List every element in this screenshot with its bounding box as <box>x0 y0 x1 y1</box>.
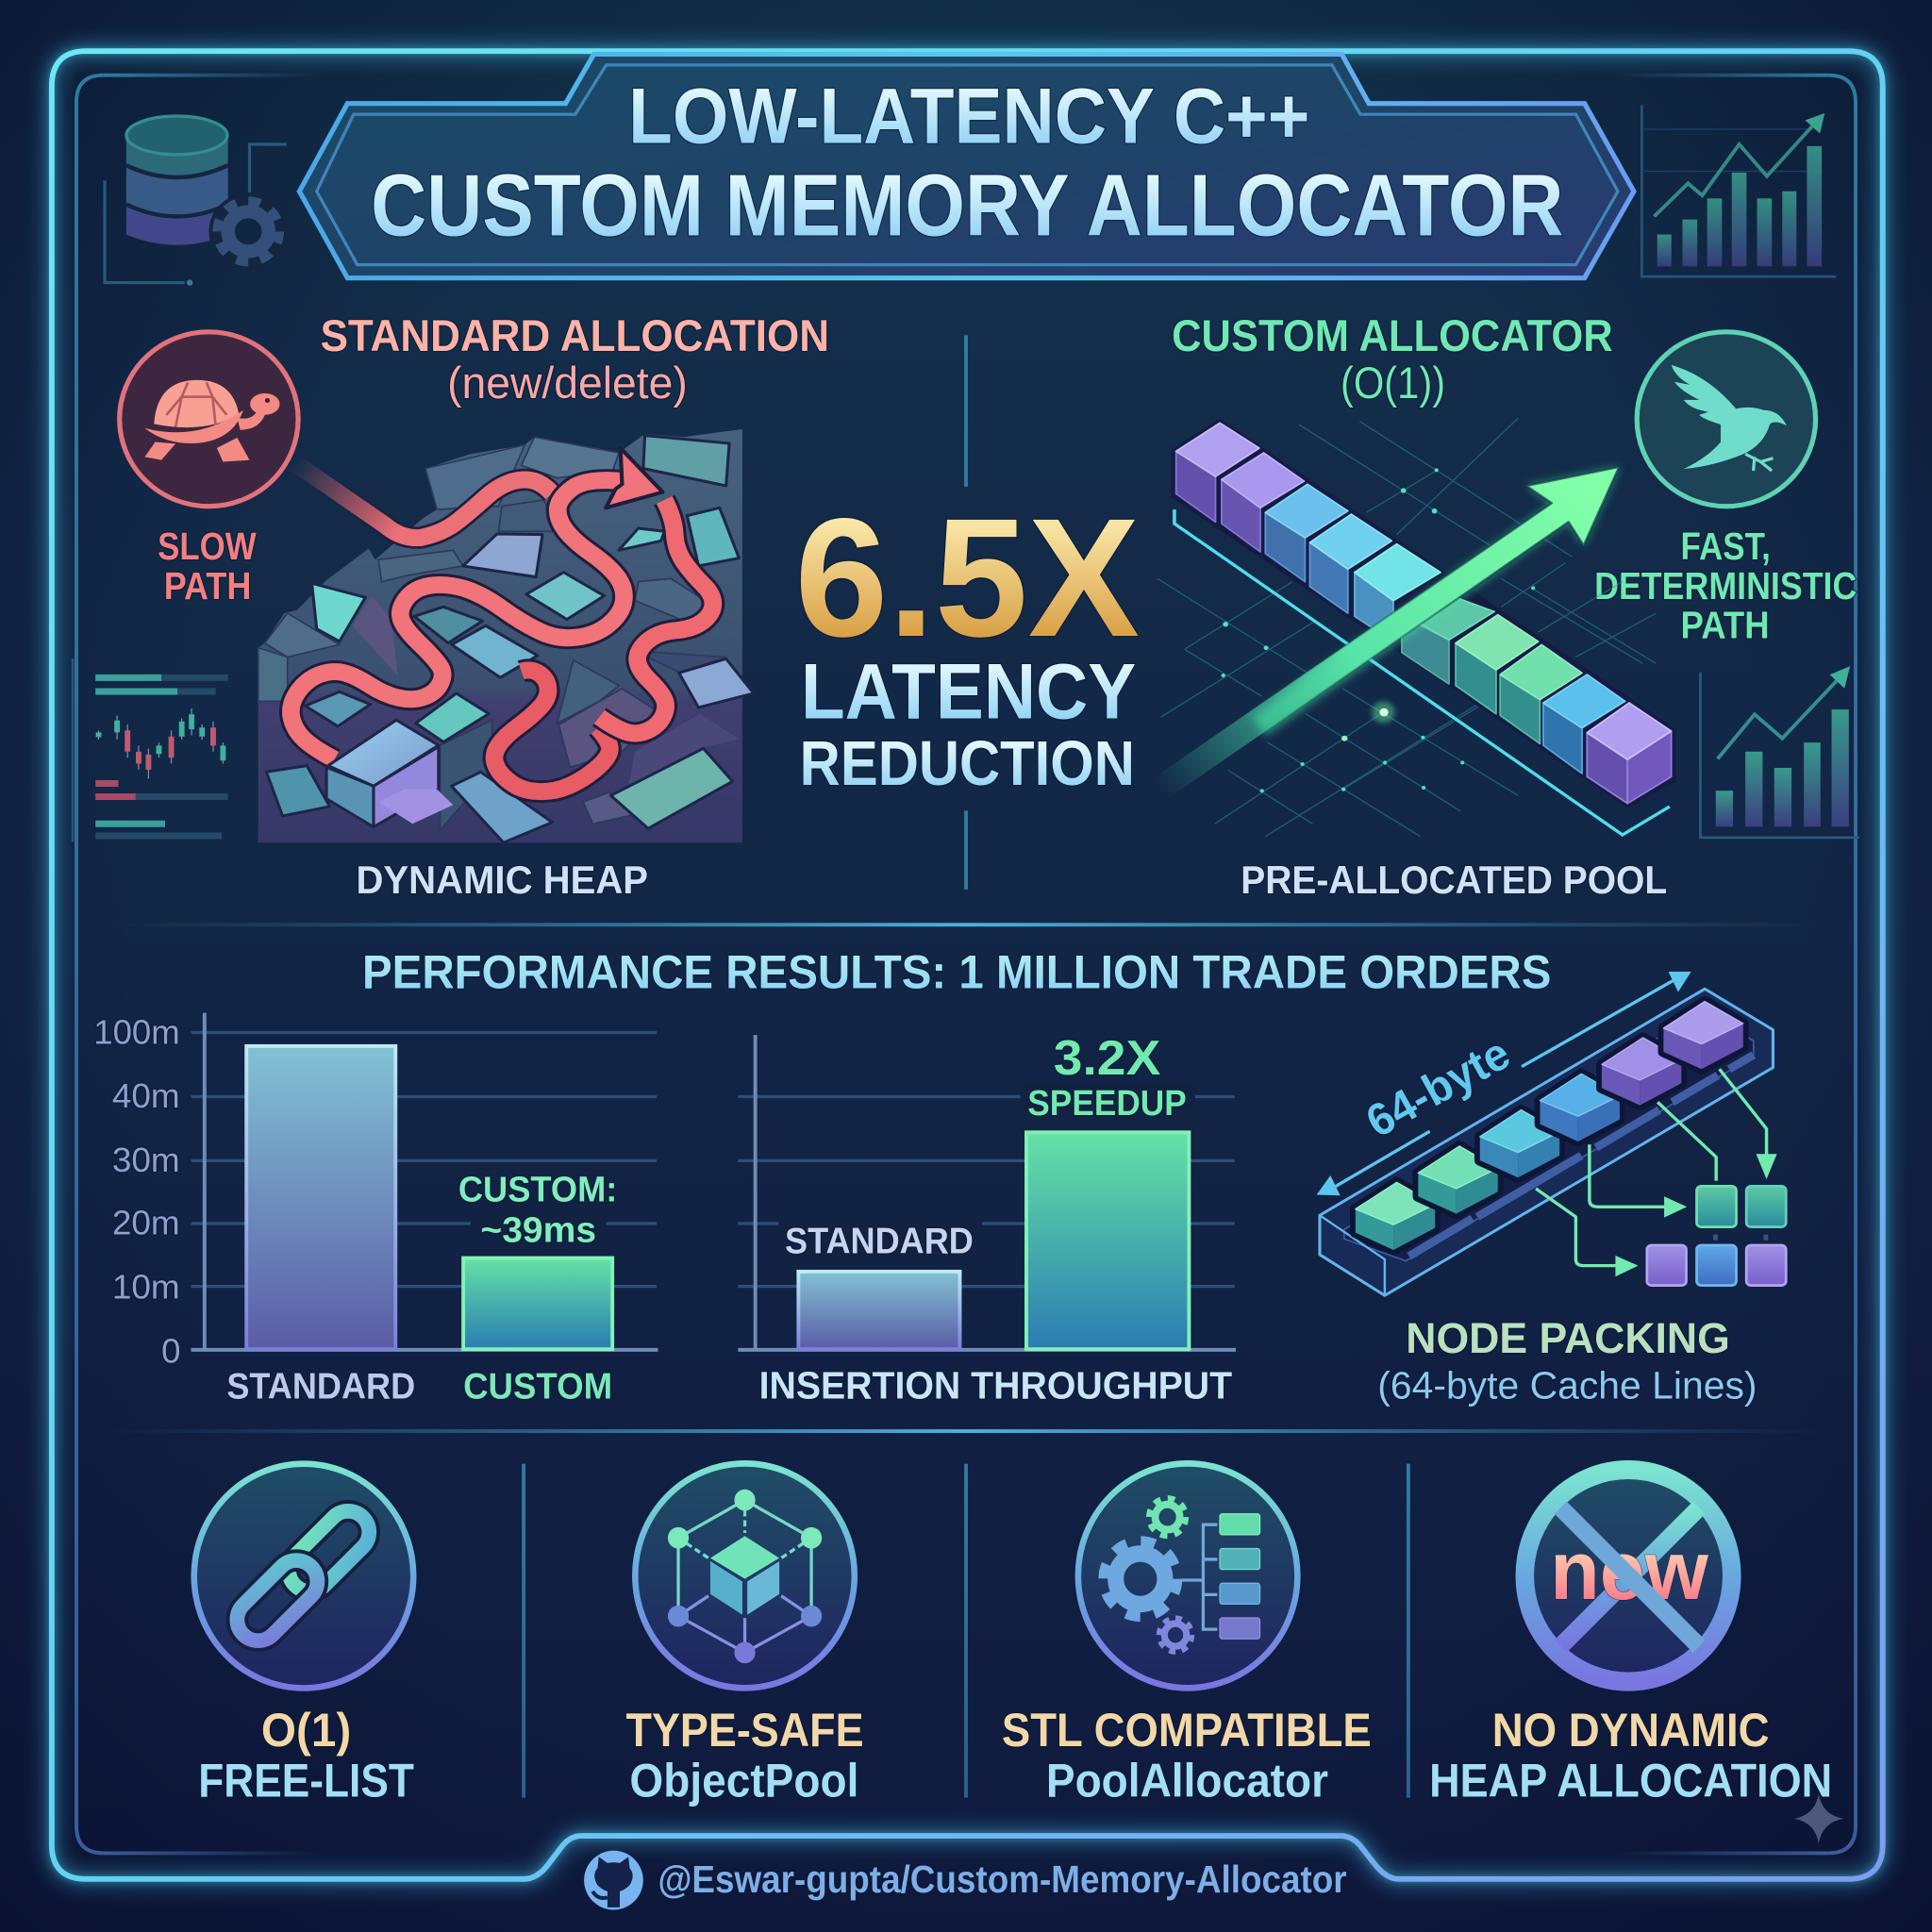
headline metric: LATENCY <box>801 646 1136 735</box>
icon: no new: new <box>1550 1524 1708 1617</box>
x labels <box>226 1366 612 1407</box>
tray <box>1320 989 1773 1295</box>
node packing label: NODE PACKING <box>1406 1314 1730 1362</box>
icon: gears and tree <box>1078 1463 1297 1688</box>
icon: cube network <box>635 1463 855 1688</box>
x labels: CUSTOM <box>463 1366 612 1407</box>
size arrow <box>1317 972 1691 1195</box>
pool: grid nodes <box>1222 468 1535 792</box>
size label: 64-byte <box>1357 1027 1519 1147</box>
node packing label <box>1377 1314 1757 1407</box>
label: TYPE-SAFE <box>626 1704 864 1757</box>
title: CUSTOM MEMORY ALLOCATOR <box>371 156 1563 254</box>
y axis labels: 20m <box>112 1204 180 1242</box>
feature: free list <box>194 1464 414 1807</box>
pool: fast arrow <box>1151 467 1619 799</box>
connectors <box>1536 1069 1767 1266</box>
dynamic heap illustration <box>258 429 754 842</box>
title banner <box>299 54 1634 278</box>
label: O(1) <box>261 1704 351 1757</box>
label <box>1429 1704 1832 1807</box>
section divider <box>105 923 1827 926</box>
fast path label: FAST, <box>1681 525 1771 568</box>
feature: no dynamic heap <box>1429 1470 1832 1807</box>
icon: database with gear <box>105 116 287 286</box>
connector arrow heads <box>1615 1154 1777 1276</box>
node packing diagram <box>1317 972 1786 1295</box>
headline metric: 6.5X <box>794 483 1140 672</box>
icon: turtle <box>120 332 298 507</box>
pool: tray outline <box>1174 509 1670 835</box>
label: NO DYNAMIC <box>1492 1704 1770 1757</box>
custom value label <box>458 1170 617 1251</box>
y axis labels: 100m <box>93 1012 180 1051</box>
y axis labels <box>93 1012 180 1371</box>
heap label: DYNAMIC HEAP <box>356 858 648 902</box>
icon: top right chart <box>1641 106 1836 276</box>
custom allocator heading: (O(1)) <box>1341 358 1445 408</box>
pre-allocated pool illustration <box>1151 418 1676 837</box>
bar: custom <box>1026 1132 1189 1349</box>
standard label: STANDARD <box>785 1221 974 1261</box>
section divider <box>105 1429 1827 1433</box>
y axis labels: 30m <box>112 1141 180 1179</box>
bar: standard <box>798 1272 959 1349</box>
heap: tangled slow path <box>291 480 713 791</box>
icon: lower right chart <box>1700 666 1859 838</box>
standard allocation heading: (new/delete) <box>447 358 688 408</box>
speedup label: SPEEDUP <box>1027 1084 1187 1124</box>
pool: grid <box>1158 418 1657 837</box>
footer <box>584 1851 1347 1909</box>
standard allocation heading <box>321 310 829 408</box>
y axis labels: 40m <box>112 1076 180 1115</box>
icon: sparkle <box>1794 1794 1843 1843</box>
bar: custom <box>463 1258 612 1349</box>
bar chart: throughput <box>738 1031 1236 1407</box>
y axis labels: 10m <box>112 1268 180 1307</box>
fast path label: DETERMINISTIC <box>1594 564 1857 608</box>
speedup label <box>1027 1031 1187 1124</box>
node packing label: (64-byte Cache Lines) <box>1377 1363 1757 1407</box>
headline metric <box>794 483 1140 799</box>
y axis labels: 0 <box>161 1332 180 1371</box>
icon: no new <box>1524 1470 1732 1682</box>
cache line blocks <box>1356 1002 1743 1250</box>
label: HEAP ALLOCATION <box>1429 1754 1832 1807</box>
label <box>1002 1704 1372 1807</box>
heap: slate fragments <box>258 437 739 830</box>
heap: path from turtle <box>294 462 552 538</box>
icon: chain link <box>194 1464 413 1688</box>
title <box>371 72 1563 254</box>
heap: arrow head <box>606 448 663 508</box>
title: LOW-LATENCY C++ <box>628 72 1309 160</box>
feature dividers <box>524 1464 1408 1798</box>
pool: fast arrow glow <box>1252 467 1619 736</box>
speedup label: 3.2X <box>1054 1031 1161 1086</box>
label <box>198 1704 414 1807</box>
pool label: PRE-ALLOCATED POOL <box>1241 858 1667 902</box>
label: STL COMPATIBLE <box>1002 1704 1372 1757</box>
slow path label: SLOW <box>158 525 257 568</box>
custom allocator heading <box>1172 310 1613 408</box>
custom allocator heading: CUSTOM ALLOCATOR <box>1172 310 1613 360</box>
icon: github <box>584 1851 643 1909</box>
feature: stl compatible <box>1002 1463 1372 1807</box>
performance heading: PERFORMANCE RESULTS: 1 MILLION TRADE ORDERS <box>362 946 1551 999</box>
bar: standard <box>246 1046 395 1349</box>
label: PoolAllocator <box>1046 1754 1328 1807</box>
icon: hawk <box>1637 332 1816 507</box>
custom value label: CUSTOM: <box>458 1170 617 1209</box>
label: ObjectPool <box>629 1754 858 1807</box>
repository label: @Eswar-gupta/Custom-Memory-Allocator <box>658 1857 1347 1901</box>
packed nodes <box>1647 1186 1786 1286</box>
bar chart: latency <box>93 1012 658 1407</box>
pool: block row <box>1171 418 1676 808</box>
fast path label: PATH <box>1681 604 1770 647</box>
label <box>626 1704 864 1807</box>
icon: left trading panel <box>73 658 228 841</box>
slow path label: PATH <box>164 564 251 608</box>
headline metric: REDUCTION <box>800 729 1135 799</box>
heap: coloured memory shards <box>266 436 754 842</box>
slow path label <box>158 525 257 608</box>
x labels: STANDARD <box>226 1366 415 1407</box>
feature: type safe <box>626 1463 864 1807</box>
center divider <box>964 335 968 890</box>
fast path label <box>1594 525 1857 647</box>
chart title: INSERTION THROUGHPUT <box>759 1363 1232 1407</box>
label: FREE-LIST <box>198 1754 414 1807</box>
custom value label: ~39ms <box>480 1211 596 1251</box>
standard allocation heading: STANDARD ALLOCATION <box>321 310 829 360</box>
heap: cube <box>326 720 453 827</box>
